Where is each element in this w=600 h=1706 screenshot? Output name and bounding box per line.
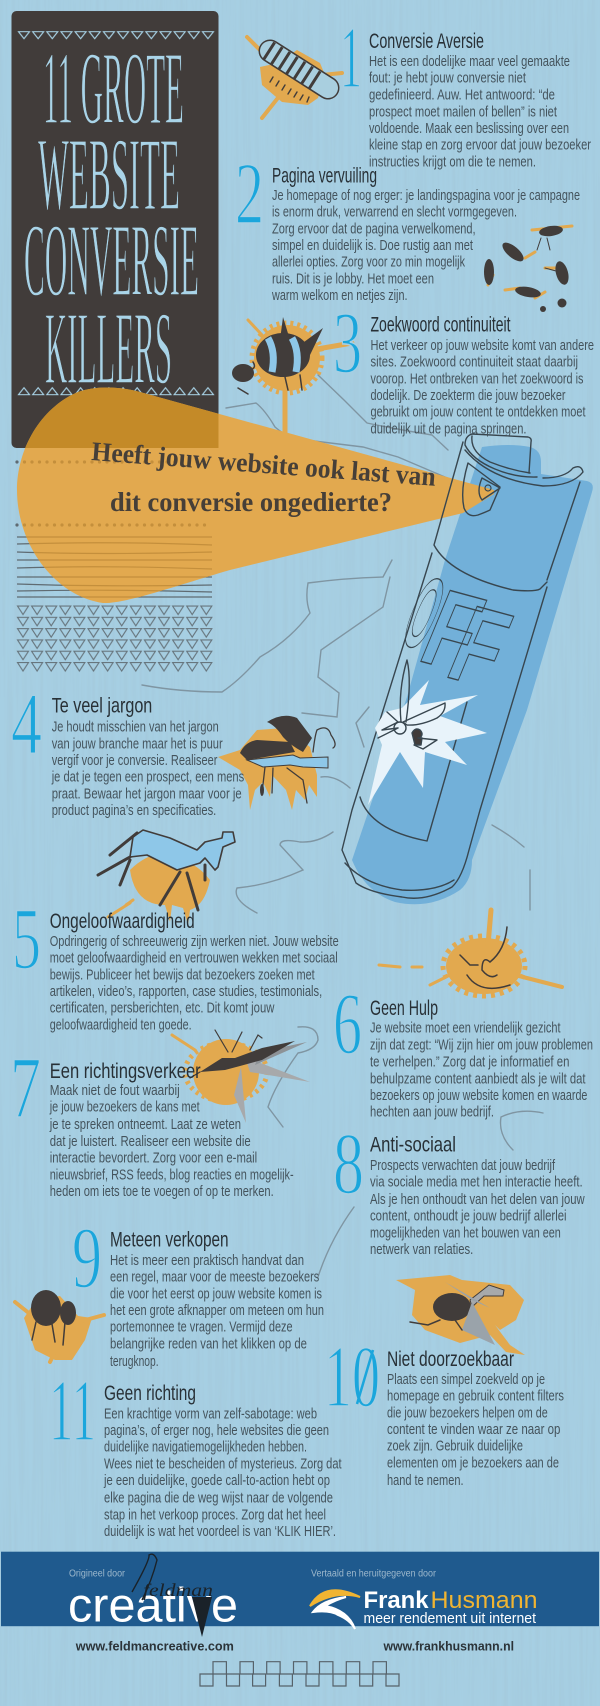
url: husmann: www.frankhusmann.nl [383,1639,514,1654]
body 10 [387,1371,564,1489]
body 7: nieuwsbrief, RSS feeds, blog reacties en mogelijk- [50,1166,294,1183]
gray squiggle lines [142,375,543,1277]
heading 4: Te veel jargon [52,695,152,718]
body 1 [369,53,591,170]
body 1: instructies krijgt om die te nemen. [369,153,536,170]
mosquito [378,660,445,749]
body 9 [110,1252,324,1370]
body 4: van jouw branche maar het is puur [52,735,223,752]
body 4: je dat je tegen een prospect, een mens [51,769,244,786]
body 5: Opdringerig of schreeuwerig zijn werken niet. Jouw website [50,933,339,950]
item 9 [72,1210,324,1370]
bug 10: fly [396,1275,525,1355]
body 9: een regel, maar voor de meeste bezoekers [110,1269,319,1286]
body 7: interactie bevordert. Zorg voor een e-mail [50,1150,257,1167]
body 7: dat je luistert. Realiseer een website die [50,1133,251,1150]
number 5: 5 [12,891,41,988]
body 2: allerlei opties. Zorg voor zo min mogelijk [272,254,465,271]
bug 1: caterpillar [247,37,342,118]
body 9: die voor het eerst op jouw website komen is [110,1285,322,1302]
logo: Frank Husmann: Husmann [430,1587,538,1614]
text: CONVERSIE [24,203,199,318]
number 11: 11 [49,1363,96,1460]
number 6: 6 [333,976,362,1073]
logo: Frank Husmann: Frank [364,1587,429,1614]
question heading: Heeft jouw website ook last van [91,436,437,492]
body 7: heden om iets toe te voegen of op te merken. [50,1183,274,1200]
bug 4: beetle [218,716,335,810]
logo: Frank Husmann: meer rendement uit internet [364,1610,537,1627]
body 5: certificaten, persberichten, etc. Dit komt jouw [50,1000,275,1017]
body 11: duidelijke navigatiemogelijkheden hebben. [104,1439,307,1456]
text: KILLERS [45,291,172,406]
body 5: artikelen, video’s, rapporten, case studies, testimonials, [50,983,322,1000]
bug 6: splat with insect [379,910,562,996]
body 7: je te spreken ontneemt. Laat ze weten [49,1116,241,1133]
can label F: F [407,567,499,694]
body 10: hand te nemen. [387,1472,464,1489]
body 11: elke pagina die de weg wijst naar de volgende [104,1490,333,1507]
number 7: 7 [10,1040,41,1137]
heading 6: Geen Hulp [370,997,438,1020]
body 11: pagina’s, of erger nog, hele websites die geen [104,1422,329,1439]
logo: feldman signature: feldman [143,1580,213,1600]
panel: title [12,11,218,448]
body 9: het een grote afknapper om meteen om hun [110,1302,324,1319]
heading 3: Zoekwoord continuiteit [370,314,511,337]
body 2: Zorg ervoor dat de pagina verwelkomend, [272,220,476,237]
item 7 [10,1040,294,1200]
can label F: F [434,583,526,710]
heading 7: Een richtingsverkeer [50,1060,201,1083]
body 8: netwerk van relaties. [370,1241,473,1258]
body 11 [103,1405,342,1540]
number 9: 9 [72,1210,102,1307]
body 11: Een krachtige vorm van zelf-sabotage: web [104,1405,317,1422]
item 5 [12,891,339,1033]
body 4: vergif voor je conversie. Realiseer [52,752,217,769]
credit: translated: Vertaald en heruitgegeven door [311,1569,437,1580]
body 2 [271,187,580,304]
item 6 [333,976,593,1121]
bug 9: beetle [15,1290,104,1362]
body 10: zoek zijn. Gebruik duidelijke [387,1438,523,1455]
pattern: lines and triangles [16,462,213,673]
body 9: portemonnee te vragen. Vermijd deze [110,1319,293,1336]
body 2: simpel en duidelijk is. Doe rustig aan met [272,237,474,254]
heading 10: Niet doorzoekbaar [387,1348,514,1371]
heading 5: Ongeloofwaardigheid [50,910,195,933]
question heading: dit conversie ongedierte? [110,487,392,517]
pencil tip [192,1597,212,1637]
body 7: je jouw bezoekers de kans met [49,1099,200,1116]
item 1 [340,10,591,170]
credit: original: Origineel door [69,1569,126,1580]
body 10: Plaats een simpel zoekveld op je [387,1371,545,1388]
bug 3: bee [232,317,352,443]
body 11: je een duidelijke, goede call-to-action hebt op [103,1472,330,1489]
number 2: 2 [235,146,264,243]
bug 2: ants [484,224,572,312]
body 4: praat. Bewaar het jargon maar voor je [52,785,242,802]
item 4 [11,676,244,819]
body 8 [370,1157,585,1258]
body 3: duidelijk uit de pagina springen. [370,420,526,437]
text: 11 GROTE [43,31,184,146]
bug 5: horse-like insect [98,830,235,925]
body 7 [49,1082,294,1200]
can body blue [352,445,593,904]
heading 11: Geen richting [104,1382,196,1405]
number 3: 3 [333,295,362,392]
number 1: 1 [340,10,362,107]
item 10 [324,1329,564,1489]
title [24,31,199,406]
body 2: is enorm druk, verwarrend en slecht vormgegeven. [272,204,517,221]
number 8: 8 [333,1116,364,1213]
question heading [91,436,437,517]
heading 9: Meteen verkopen [110,1229,229,1252]
url: feldman: www.feldmancreative.com [75,1639,234,1654]
body 2: warm welkom en netjes zijn. [271,287,408,304]
logo: Frank Husmann [364,1587,538,1627]
body 5 [50,933,339,1033]
item 2 [235,146,580,304]
body 6: hechten aan jouw bedrijf. [370,1104,494,1121]
text: WEBSITE [38,117,180,232]
nozzle [463,463,500,516]
body 6 [370,1020,593,1121]
heading 8: Anti-sociaal [370,1134,456,1157]
body 9: terugknop. [110,1353,159,1370]
body 5: moet geloofwaardigheid en vertrouwen wekken met sociaal [50,950,338,967]
body 11: duidelijk is wat het voordeel is van ‘KLIK HIER’. [104,1523,336,1540]
body 9: belangrijke reden van het klikken op de [110,1335,307,1352]
burst [368,680,487,805]
heading 1: Conversie Aversie [369,30,484,53]
checker pattern [200,1662,399,1686]
number 10 [324,1329,380,1426]
body 4: Je houdt misschien van het jargon [52,719,219,736]
body 7: Maak niet de fout waarbij [50,1082,180,1099]
body 2: ruis. Dit is je lobby. Het moet een [272,270,434,287]
nozzle hole [485,485,491,491]
body 5: geloofwaardigheid ten goede. [50,1016,192,1033]
number 10: 10 [324,1329,380,1426]
logo: swoosh [310,1590,360,1629]
body 11: Wees niet te bescheiden of mysterieus. Zorg dat [104,1455,342,1472]
spray beam [12,380,494,603]
body 5: bewijs. Publiceer het bewijs dat bezoekers zoeken met [50,966,315,983]
body 4: product pagina’s en specificaties. [52,802,216,819]
bug 7: mosquito [172,1030,310,1123]
body 1: fout: je hebt jouw conversie niet [369,70,527,87]
heading 2: Pagina vervuiling [272,165,377,188]
item 3 [333,295,594,437]
footer band [1,1552,599,1637]
can label O: O [389,556,459,671]
item 11 [49,1363,342,1540]
body 9: Het is meer een praktisch handvat dan [110,1252,304,1269]
body 4 [51,719,244,819]
body 3 [370,337,594,437]
logo: creative: creative [68,1580,238,1633]
spray can [342,434,583,898]
item 8 [333,1116,585,1258]
body 11: stap in het verkoop proces. Zorg dat het heel [104,1506,326,1523]
number 4: 4 [11,676,42,773]
logo: feldman signature [132,1554,213,1600]
